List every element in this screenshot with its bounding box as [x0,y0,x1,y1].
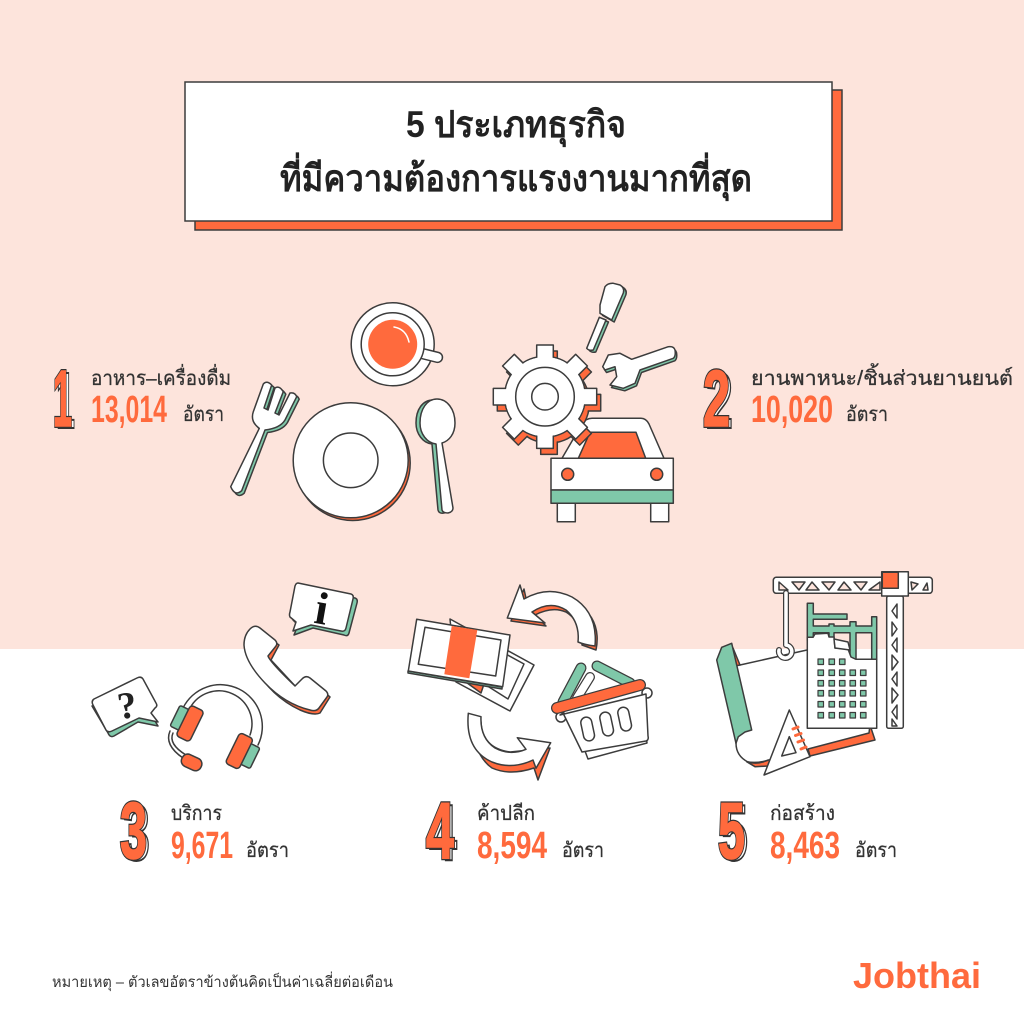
back banknote [450,619,534,711]
item 3 text: บริการ [171,802,222,825]
item 1 text [53,354,231,445]
item 3 text [120,786,289,877]
set square [764,710,810,775]
item 2 text: 2 [703,354,730,443]
building frame [807,603,877,659]
footnote: หมายเหตุ – ตัวเลขอัตราข้างต้นคิดเป็นค่าเฉลี่ยต่อเดือน [52,971,393,992]
item 3 text: 3 [120,786,147,875]
icon: food [231,303,455,520]
spoon [416,399,455,513]
item 1 text: 1 [53,354,72,443]
item 2 text: 10,020 [751,389,833,431]
title box [185,82,842,230]
blueprint [717,643,875,767]
icon: auto parts [493,283,677,522]
icon: construction [717,572,932,775]
item 1 text: 13,014 [91,389,167,431]
bottom arrow [468,713,551,780]
item 2 text [703,354,1013,445]
item 2 text: ยานพาหนะ/ชิ้นส่วนยานยนต์ [751,363,1013,390]
item 2 text: 2 [703,354,730,443]
item 5 text: อัตรา [855,839,897,862]
front banknote [408,619,510,689]
item 4 text: ค้าปลีก [477,802,535,825]
item 2 text: อัตรา [846,403,888,426]
fork [231,382,299,495]
top arrow [507,585,597,650]
item 2 text: 2 [706,356,733,445]
item 1 text: อาหาร–เครื่องดื่ม [91,364,231,390]
item 3 text: 9,671 [171,825,233,867]
item 5 text: 5 [721,788,748,877]
plate [293,403,410,520]
icon: retail [408,585,652,780]
item 5 text: ก่อสร้าง [770,802,835,825]
item 3 text: อัตรา [246,839,289,862]
screwdriver [587,283,626,352]
gear shadow [497,351,601,454]
crane [773,572,932,728]
item 5 text [718,786,897,877]
item 3 text: 3 [120,786,147,875]
gear [493,345,597,448]
question bubble: ? [115,684,139,728]
building [807,633,877,728]
item 1 text: 1 [56,356,75,445]
info bubble [290,582,357,636]
item 4 text: 4 [426,786,454,875]
question bubble [92,677,158,737]
icon: customer service [92,582,357,773]
phone [244,626,330,714]
logo: Jobthai: Jobthai [853,955,981,996]
car [551,418,673,522]
wrench [603,347,677,391]
item 4 text: อัตรา [562,839,604,862]
item 3 text: 3 [123,788,150,877]
headset [169,685,262,773]
item 4 text [426,786,604,877]
title box: ที่มีความต้องการแรงงานมากที่สุด [280,152,752,202]
info bubble: i [311,582,333,635]
item 5 text: 5 [718,786,745,875]
background panel [0,0,1024,649]
item 4 text: 4 [426,786,454,875]
item 4 text: 4 [429,788,457,877]
item 4 text: 8,594 [477,825,547,867]
item 1 text: อัตรา [183,403,224,426]
saucer and cup [351,303,444,386]
item 5 text: 8,463 [770,825,840,867]
basket [556,666,652,759]
item 5 text: 5 [718,786,745,875]
item 1 text: 1 [53,354,72,443]
title box: 5 ประเภทธุรกิจ [406,104,626,148]
